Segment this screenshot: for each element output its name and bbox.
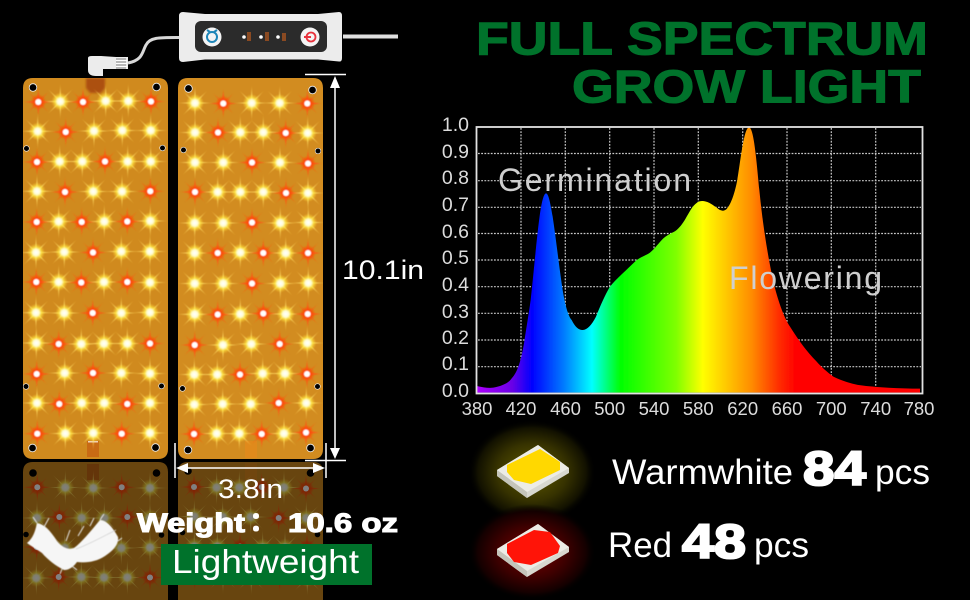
warm white count: 84 [803,443,866,496]
y axis labels: 0.3 [442,301,469,323]
spectrum curve [477,127,920,393]
weight text: 10.6 oz [288,508,398,538]
weight text: ： [243,508,269,538]
y axis labels: 0.7 [442,194,469,216]
x axis labels: 540 [639,398,669,419]
x axis labels: 700 [816,398,847,419]
red count: Red [608,526,672,565]
label: Germination: Germination [498,162,691,198]
dimension: panel width [175,443,326,478]
control box with buttons [179,12,398,62]
icon: red LED chip [468,504,596,600]
lightweight badge [161,543,372,585]
title: FULL SPECTRUM [476,12,928,64]
red count [608,516,809,569]
power plug and cable [88,37,181,76]
title: GROW LIGHT [572,60,921,112]
chart frame [476,127,922,394]
chart grid [478,128,921,392]
y axis labels: 0.8 [442,167,469,189]
x axis labels: 660 [772,398,802,419]
y axis labels: 0.6 [442,221,469,243]
lightweight badge: Lightweight [172,543,359,580]
y axis labels: 0.0 [442,380,469,402]
x axis labels: 740 [860,398,891,419]
x axis labels: 500 [594,398,625,419]
icon: warm white LED chip [468,420,596,524]
label: Flowering: Flowering [729,260,882,296]
label: 10.1in: 10.1in [342,255,424,285]
x axis labels: 620 [727,398,758,419]
x axis labels: 780 [904,398,934,419]
x axis labels: 420 [506,398,536,419]
title [476,12,928,112]
y axis labels [442,114,469,402]
y axis labels: 0.9 [442,141,469,163]
x axis labels: 380 [462,398,492,419]
x axis labels: 580 [683,398,714,419]
right LED panel [175,78,327,459]
reflection of LED panels [17,462,326,600]
left LED panel [17,78,170,459]
y axis labels: 0.2 [442,327,469,349]
y axis labels: 0.5 [442,247,469,269]
y axis labels: 0.1 [442,353,469,375]
red count: pcs [754,526,809,565]
red count: 48 [682,516,746,569]
feather icon [27,514,122,574]
warm white count: pcs [875,453,930,492]
x axis labels [462,398,934,419]
spectrum chart [442,114,934,419]
y axis labels: 0.4 [442,274,469,296]
y axis labels: 1.0 [442,114,469,136]
label: 3.8in: 3.8in [218,474,283,504]
warm white count [612,443,930,496]
weight text: Weight [137,508,245,538]
dimension: panel height [305,74,346,460]
warm white count: Warmwhite [612,453,793,492]
x axis labels: 460 [550,398,581,419]
weight text [137,508,398,538]
